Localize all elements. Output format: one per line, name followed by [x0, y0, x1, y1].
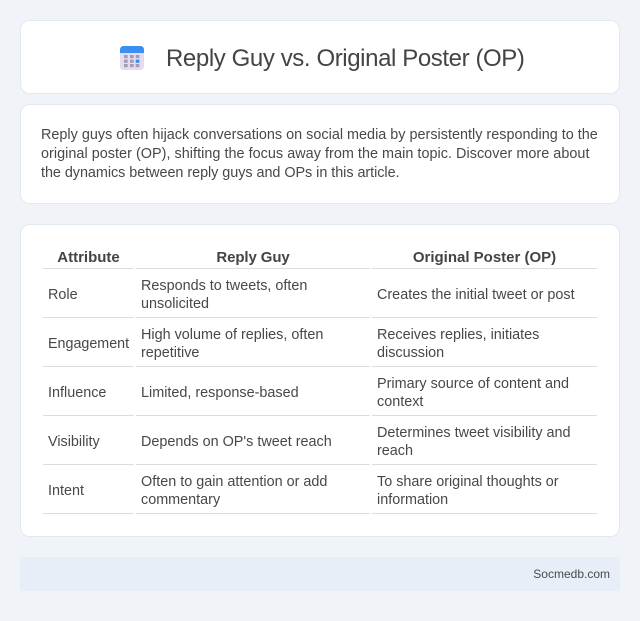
row: intent: Often to gain attention or add	[141, 474, 327, 490]
intro text	[41, 127, 598, 181]
footer text: Socmedb.com	[533, 567, 610, 581]
intro text: the dynamics between reply guys and OPs in this article.	[41, 165, 400, 181]
row: engagement	[48, 327, 539, 361]
intro text: original poster (OP), shifting the focus away from the main topic. Discover more about	[41, 146, 590, 162]
panel: introduction	[20, 104, 620, 204]
panel: title card	[20, 20, 620, 94]
table header: Reply Guy	[216, 249, 290, 266]
row: role: Creates the initial tweet or post	[377, 287, 575, 303]
table header: Original Poster (OP)	[413, 249, 556, 266]
row: visibility: Depends on OP's tweet reach	[141, 434, 332, 450]
row: intent: To share original thoughts or	[377, 474, 559, 490]
table header: Attribute	[57, 249, 120, 266]
intro text: Reply guys often hijack conversations on social media by persistently responding to the	[41, 127, 598, 143]
row: influence: Influence	[48, 385, 106, 401]
row: role	[48, 278, 575, 312]
row: engagement: repetitive	[141, 345, 199, 361]
row: engagement: High volume of replies, often	[141, 327, 323, 343]
row: influence: Primary source of content and	[377, 376, 569, 392]
row: role: Responds to tweets, often	[141, 278, 307, 294]
title: Reply Guy vs. Original Poster (OP)	[166, 45, 525, 72]
row: visibility: reach	[377, 443, 413, 459]
row: role: unsolicited	[141, 296, 209, 312]
table header	[57, 249, 556, 266]
row: visibility: Visibility	[48, 434, 100, 450]
row: intent	[48, 474, 559, 508]
row: visibility	[48, 425, 571, 459]
row: role: Role	[48, 287, 78, 303]
row: engagement: discussion	[377, 345, 444, 361]
row: intent: information	[377, 492, 448, 508]
footer	[20, 557, 620, 591]
row: influence	[48, 376, 569, 410]
row: intent: commentary	[141, 492, 220, 508]
icon: calendar	[120, 46, 144, 70]
row: engagement: Engagement	[48, 336, 129, 352]
row: influence: Limited, response-based	[141, 385, 299, 401]
row: engagement: Receives replies, initiates	[377, 327, 539, 343]
row: influence: context	[377, 394, 423, 410]
row: intent: Intent	[48, 483, 84, 499]
panel: comparison table	[20, 224, 620, 537]
row: visibility: Determines tweet visibility and	[377, 425, 571, 441]
